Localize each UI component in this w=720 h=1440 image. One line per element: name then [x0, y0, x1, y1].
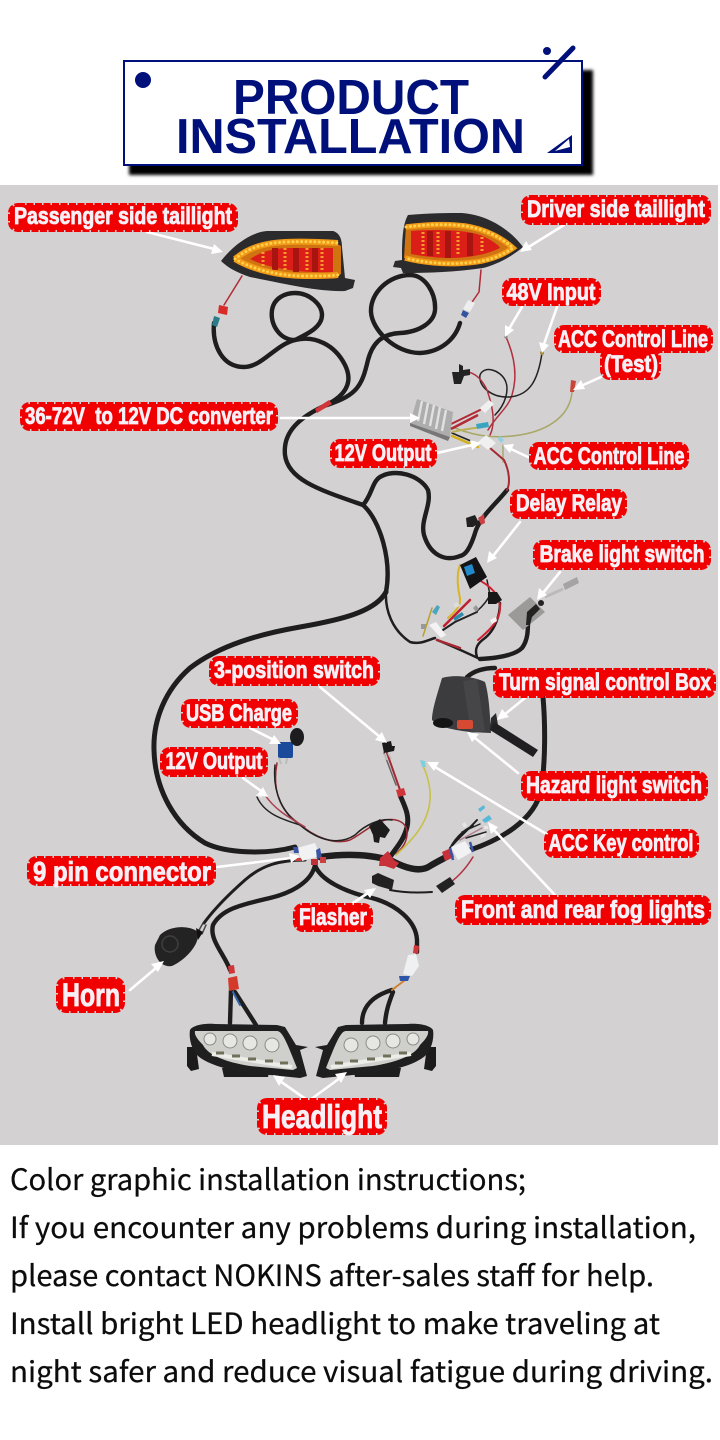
wiring harness — [154, 275, 545, 1025]
text block: installation notes: If you encounter any problems during installation, — [10, 1205, 696, 1247]
crimp terminals — [421, 602, 497, 638]
icon: turn signal control box — [432, 676, 538, 757]
label: DC converter: 36-72V to 12V DC converter — [25, 403, 273, 430]
label: nine pin connector: 9 pin connector — [33, 856, 211, 887]
taillight connectors — [212, 300, 475, 413]
icon: fog light terminals — [420, 760, 492, 838]
icon: delay relay — [460, 514, 502, 604]
icon: three-position switch — [382, 741, 406, 797]
panel: wiring diagram — [0, 185, 718, 1145]
icon: flasher — [372, 873, 455, 893]
label: 12V output lower: 12V Output — [166, 748, 262, 775]
text block: installation notes: Color graphic installation instructions; — [10, 1157, 526, 1199]
text block: installation notes: please contact NOKINS after-sales staff for help. — [10, 1253, 654, 1295]
label: flasher: Flasher — [299, 904, 367, 931]
icon: passenger taillight — [221, 231, 355, 291]
label: three-position switch: 3-position switch — [214, 657, 374, 684]
icon: brake light switch — [508, 577, 579, 630]
title banner — [124, 47, 593, 175]
label: delay relay: Delay Relay — [516, 490, 623, 517]
icon: horn — [155, 927, 203, 966]
icon: USB charger — [256, 728, 304, 797]
label: horn: Horn — [62, 977, 120, 1013]
thin signal wires — [198, 270, 572, 1005]
label: 48V input: 48V Input — [506, 279, 596, 306]
arrows — [130, 225, 601, 1100]
label: USB charge: USB Charge — [186, 700, 292, 727]
text block: installation notes: night safer and reduce visual fatigue during driving. — [10, 1349, 713, 1391]
icon: right headlight — [315, 1024, 436, 1078]
icon: DC converter — [410, 399, 453, 441]
label: 12V output upper: 12V Output — [334, 440, 432, 467]
icon: left headlight — [187, 1024, 308, 1078]
converter wires and fuse — [451, 335, 576, 450]
label: passenger side taillight: Passenger side taillight — [14, 203, 232, 230]
icon: driver taillight — [393, 213, 523, 273]
label: ACC control line test: (Test) — [604, 351, 658, 378]
center sleeves and connectors — [228, 841, 473, 991]
text block: installation notes: Install bright LED headlight to make traveling at — [10, 1301, 660, 1343]
text block: installation notes — [10, 1157, 713, 1391]
label: ACC control line test — [556, 326, 711, 378]
label: headlight: Headlight — [262, 1098, 382, 1135]
title banner: INSTALLATION — [176, 110, 525, 164]
title banner: PRODUCT — [233, 71, 469, 125]
fuse holder — [369, 819, 390, 843]
